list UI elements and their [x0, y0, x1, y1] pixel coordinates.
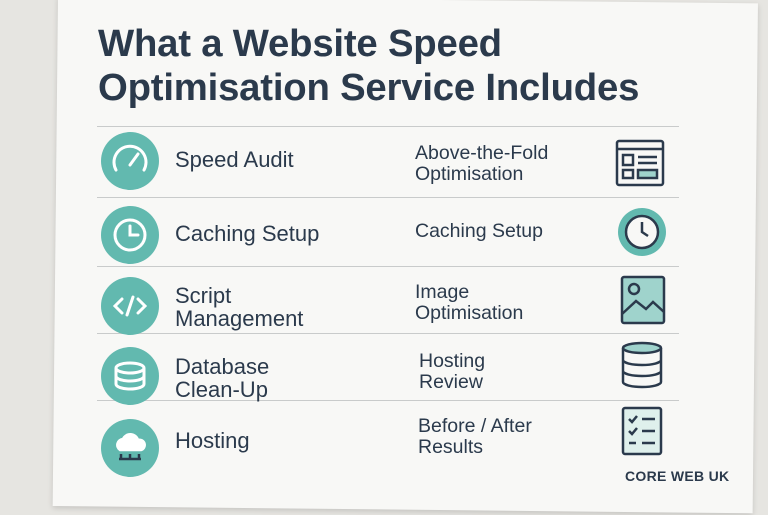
icon: clock right — [618, 208, 666, 256]
label: above the fold: Optimisation — [415, 163, 523, 185]
label: database clean-up: Database — [175, 354, 269, 379]
label: before after results: Before / After — [418, 415, 532, 437]
label: above the fold — [415, 142, 548, 185]
title: What a Website Speed — [98, 22, 502, 65]
label: hosting review — [419, 350, 485, 393]
title: Optimisation Service Includes — [98, 66, 639, 109]
label: caching setup: Caching Setup — [175, 221, 319, 246]
label: script management: Script — [175, 283, 231, 308]
icon: layout — [616, 140, 664, 186]
label: speed audit: Speed Audit — [175, 147, 294, 172]
icon: database — [101, 347, 159, 405]
title — [98, 22, 639, 109]
label: above the fold: Above-the-Fold — [415, 142, 548, 164]
label: hosting review: Review — [419, 371, 483, 393]
label: script management: Management — [175, 306, 303, 331]
label: image optimisation: Optimisation — [415, 302, 523, 324]
icon: cloud hosting — [101, 419, 159, 477]
label: image optimisation — [415, 281, 523, 324]
label: hosting: Hosting — [175, 428, 250, 453]
label: script management — [175, 283, 304, 331]
label: hosting review: Hosting — [419, 350, 485, 372]
label: before after results — [418, 415, 532, 458]
footer brand: CORE WEB UK — [625, 468, 729, 484]
label: caching setup right: Caching Setup — [415, 220, 543, 242]
label: database clean-up — [175, 354, 269, 402]
label: image optimisation: Image — [415, 281, 469, 303]
icon: code — [101, 277, 159, 335]
icon: speedometer — [101, 132, 159, 190]
label: database clean-up: Clean-Up — [175, 377, 268, 402]
icon: server stack — [622, 342, 662, 388]
icon: clock — [101, 206, 159, 264]
icon: image — [620, 276, 666, 324]
label: before after results: Results — [418, 436, 483, 458]
icon: checklist — [622, 406, 662, 456]
